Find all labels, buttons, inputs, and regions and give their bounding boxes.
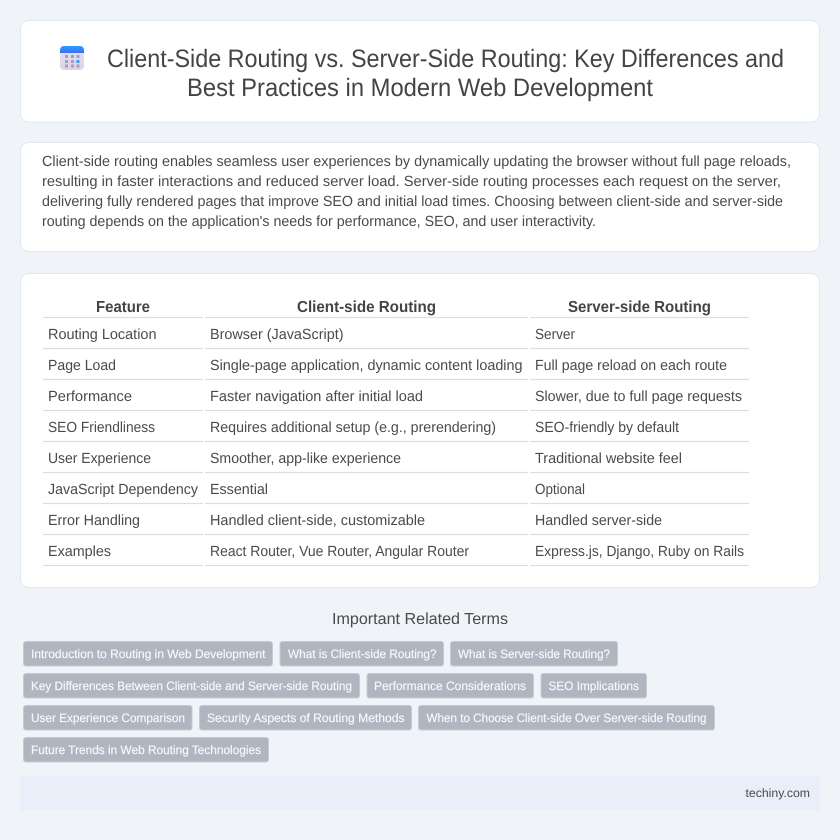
tag: User Experience Comparison (31, 711, 185, 725)
table row: user experience (48, 451, 682, 467)
table row: error handling: Handled server-side (535, 513, 662, 529)
tag (200, 706, 412, 730)
footer (20, 776, 820, 810)
tag: Key Differences Between Client-side and Server-side Routing (31, 679, 352, 693)
table header: Server-side Routing (568, 299, 711, 316)
table row: examples: Examples (48, 544, 111, 560)
text block: introduction paragraph: delivering fully rendered pages that improve SEO and initial load times. Choosing between client-side and server-side (42, 194, 783, 210)
table row: javascript dependency: JavaScript Dependency (48, 482, 199, 498)
tag (24, 706, 192, 730)
table row: seo friendliness (48, 420, 679, 436)
table header (96, 299, 711, 316)
tag (24, 674, 360, 698)
tag: Future Trends in Web Routing Technologies (31, 743, 261, 757)
table row: page load (48, 358, 727, 374)
tag: When to Choose Client-side Over Server-side Routing (426, 711, 706, 725)
tag: What is Server-side Routing? (458, 647, 610, 661)
table row: performance: Performance (48, 389, 132, 405)
heading: important related terms: Important Related Terms (332, 611, 508, 628)
tag (24, 642, 272, 666)
text block: introduction paragraph (42, 154, 791, 230)
table row: routing location: Server (535, 327, 575, 343)
icon: calendar grid (60, 46, 84, 70)
table row: performance: Slower, due to full page requests (535, 389, 742, 405)
table row: examples: React Router, Vue Router, Angular Router (210, 544, 469, 560)
table row: javascript dependency: Essential (210, 482, 268, 498)
table row: error handling (48, 513, 662, 529)
tag (280, 642, 444, 666)
title (107, 45, 784, 102)
table row: javascript dependency: Optional (535, 482, 585, 498)
table row: error handling: Error Handling (48, 513, 140, 529)
tag (367, 674, 534, 698)
tag: Introduction to Routing in Web Development (31, 647, 266, 661)
table header: Client-side Routing (297, 299, 436, 316)
table row: routing location (48, 327, 575, 343)
text block: introduction paragraph: Client-side routing enables seamless user experiences by dynamically updating the browser without full page reloads, (42, 154, 791, 170)
title: Client-Side Routing vs. Server-Side Routing: Key Differences and (107, 45, 784, 73)
tag (541, 674, 646, 698)
tag (450, 642, 618, 666)
footer source: techiny.com (746, 786, 810, 800)
table row: routing location: Browser (JavaScript) (210, 327, 344, 343)
table row: page load: Full page reload on each route (535, 358, 727, 374)
text block: introduction paragraph: resulting in faster interactions and reduced server load. Server-side routing processes each request on the server, (42, 174, 781, 190)
table row: seo friendliness: SEO Friendliness (48, 420, 155, 436)
table header: Feature (96, 299, 150, 316)
table row: user experience: Smoother, app-like experience (210, 451, 401, 467)
table row: performance (48, 389, 742, 405)
table row: page load: Page Load (48, 358, 116, 374)
table row: error handling: Handled client-side, customizable (210, 513, 425, 529)
tag (418, 706, 714, 730)
panel: comparison table (20, 274, 820, 588)
table row: javascript dependency (48, 482, 585, 498)
table row: examples (48, 544, 744, 560)
tag: Performance Considerations (374, 679, 526, 693)
table row: routing location: Routing Location (48, 327, 156, 343)
table row: examples: Express.js, Django, Ruby on Rails (535, 544, 744, 560)
tag (24, 738, 268, 762)
panel: related term tags (24, 642, 714, 762)
tag: What is Client-side Routing? (288, 647, 437, 661)
panel: title card (20, 20, 820, 122)
panel: introduction (20, 142, 820, 252)
table row: user experience: Traditional website feel (535, 451, 682, 467)
table row: seo friendliness: Requires additional setup (e.g., prerendering) (210, 420, 496, 436)
title: Best Practices in Modern Web Development (187, 74, 653, 102)
tag: SEO Implications (548, 679, 639, 693)
table row: page load: Single-page application, dynamic content loading (210, 358, 522, 374)
table row: performance: Faster navigation after initial load (210, 389, 423, 405)
table row: user experience: User Experience (48, 451, 151, 467)
text block: introduction paragraph: routing depends on the application's needs for performance, SEO, and user interactivity. (42, 214, 596, 230)
table row: seo friendliness: SEO-friendly by default (535, 420, 679, 436)
tag: Security Aspects of Routing Methods (207, 711, 404, 725)
